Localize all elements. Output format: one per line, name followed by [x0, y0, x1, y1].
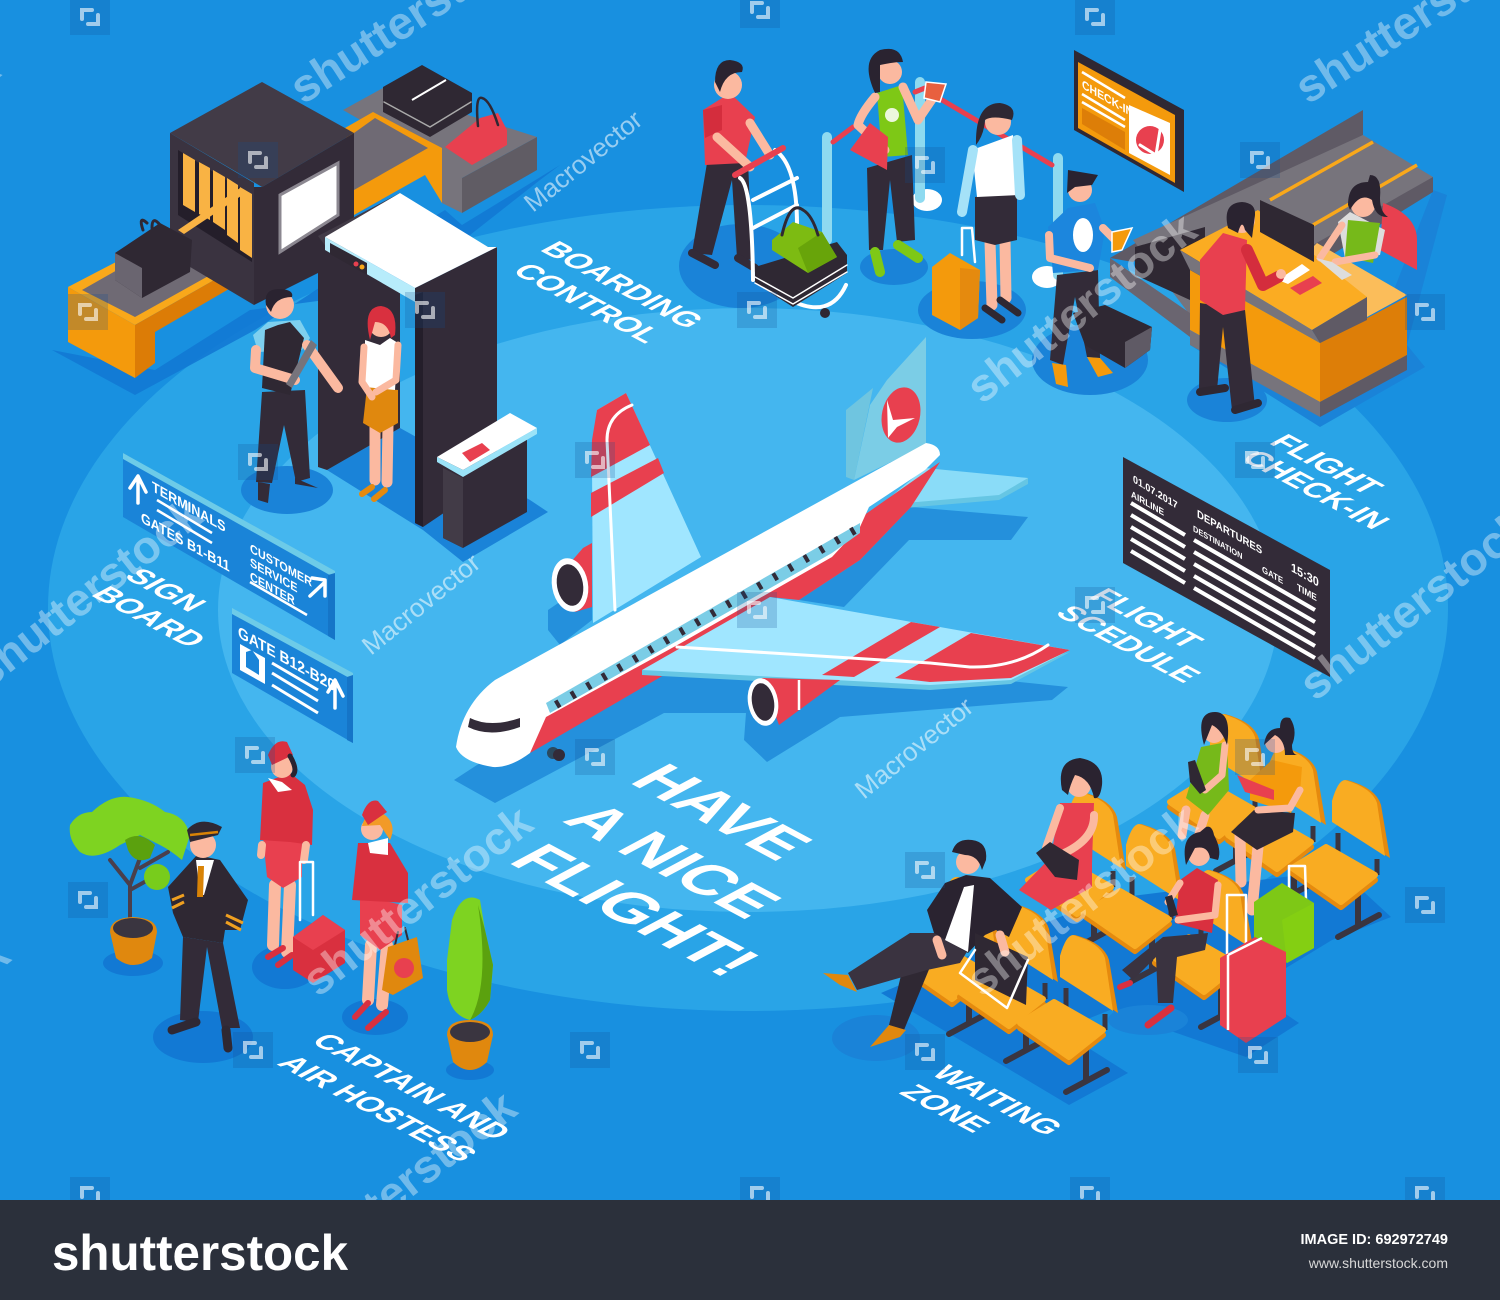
green suitcase	[1254, 866, 1314, 963]
panel: flight schedule board: 15:30	[1291, 560, 1319, 590]
label: flight scedule: SCEDULE	[1048, 601, 1209, 687]
watermarks: shutterstock	[956, 202, 1206, 413]
airplane	[454, 337, 1070, 803]
watermarks: shutterstock	[276, 1080, 526, 1291]
outer floor ellipse	[48, 205, 1448, 1011]
rope barriers	[827, 82, 1062, 288]
check-in clerk	[1316, 175, 1417, 280]
far engine	[548, 543, 592, 615]
green bag on trolley	[772, 208, 837, 273]
panel: flight schedule board: DESTINATION	[1193, 523, 1242, 561]
check-in conveyor	[1110, 110, 1433, 337]
captain	[168, 822, 248, 1048]
heading: have a nice flight: FLIGHT!	[495, 836, 775, 985]
woman with phone	[1120, 827, 1219, 1025]
far wing	[591, 393, 701, 623]
terminals sign: TERMINALS	[152, 479, 226, 537]
conveyor bench	[68, 222, 253, 378]
heading: have a nice flight: A NICE	[549, 795, 796, 927]
label: sign board: SIGN	[117, 564, 214, 616]
heading: have a nice flight	[495, 756, 827, 985]
terminals sign: CENTER	[250, 569, 295, 608]
panel: flight schedule board: GATE	[1262, 564, 1283, 586]
panel: flight schedule board	[1123, 457, 1330, 677]
red suitcase	[1220, 895, 1286, 1043]
inner floor ellipse	[218, 308, 1278, 912]
terminals sign: CUSTOMER	[250, 541, 312, 590]
panel: boarding control	[52, 65, 560, 562]
footer bar	[0, 1200, 1500, 1300]
black bag on floor	[1073, 305, 1152, 368]
ticket stand	[437, 413, 537, 548]
metal detector gate	[318, 193, 497, 527]
front row chairs	[903, 877, 1118, 1092]
floor shadow	[832, 870, 1391, 1105]
floor shadows	[679, 190, 1447, 427]
x-ray scanner	[170, 82, 354, 305]
label: boarding control: CONTROL	[505, 259, 670, 347]
gate sign	[232, 608, 353, 743]
watermarks: Macrovector	[849, 691, 979, 805]
label: sign board: BOARD	[84, 582, 215, 652]
website: www.shutterstock.com	[1308, 1255, 1448, 1271]
floor shadows	[103, 945, 494, 1080]
label: captain and air hostess: CAPTAIN AND	[304, 1029, 519, 1144]
panel: flight schedule board: AIRLINE	[1131, 489, 1164, 519]
passenger with trolley	[692, 60, 770, 268]
label: flight check-in: FLIGHT	[1262, 430, 1391, 499]
floor shadows	[52, 165, 560, 562]
terminals sign: SERVICE	[250, 555, 298, 596]
woman in white blouse with suitcase	[932, 103, 1020, 330]
man at desk in red	[1187, 202, 1286, 422]
label: waiting zone: WAITING	[924, 1061, 1071, 1140]
footer logo: shutterstock	[52, 1225, 348, 1281]
seated man in black	[823, 840, 1028, 1047]
label: boarding control: BOARDING	[533, 237, 712, 333]
gate sign: GATE B12-B20	[238, 624, 335, 696]
check-in desk	[1180, 210, 1407, 417]
fuselage	[456, 443, 940, 767]
duffel bag on belt	[115, 220, 192, 298]
right potted plant	[447, 898, 493, 1070]
middle row chairs	[1028, 792, 1253, 1027]
tail fin	[854, 337, 926, 480]
image id: IMAGE ID: 692972749	[1300, 1232, 1448, 1248]
check-in TV sign	[1074, 50, 1184, 192]
orange suitcase	[962, 228, 975, 262]
stabilizer	[881, 468, 1028, 510]
black suitcase	[383, 65, 472, 137]
computer monitor	[1260, 200, 1314, 262]
left potted tree	[70, 797, 190, 965]
watermarks: shutterstock	[292, 795, 542, 1006]
terminals sign: GATES B1-B11	[141, 510, 230, 576]
woman in red dress	[1019, 758, 1102, 910]
terminals sign	[123, 453, 335, 640]
label: flight scedule: FLIGHT	[1082, 584, 1211, 653]
laptop bag	[975, 933, 1028, 1005]
hostess two	[352, 801, 423, 1028]
woman in detector	[362, 306, 398, 499]
watermarks: Macrovector	[518, 104, 648, 218]
back baggage table	[343, 65, 537, 215]
watermarks: Macrovector	[356, 547, 486, 661]
luggage trolley	[735, 148, 846, 318]
watermarks: shutterstock	[956, 795, 1206, 1006]
panel: flight schedule board: TIME	[1297, 582, 1317, 604]
woman with red book	[1231, 717, 1302, 910]
label: flight check-in: CHECK-IN	[1234, 446, 1398, 533]
security officer	[241, 289, 338, 514]
near wing	[642, 597, 1070, 690]
back row chairs	[1170, 714, 1390, 937]
woman with tablet	[1182, 712, 1229, 840]
plane shadow	[454, 507, 1068, 803]
panel: sign boards	[123, 453, 353, 743]
woman with green top	[850, 49, 946, 272]
panel: flight schedule board: DEPARTURES	[1197, 508, 1262, 557]
hostess one	[260, 741, 345, 983]
near engine	[744, 676, 840, 728]
back tail fin	[846, 388, 873, 480]
man in blue t-shirt	[1048, 170, 1152, 387]
panel: waiting zone	[823, 712, 1391, 1105]
panel: flight schedule board: 01.07.2017	[1133, 474, 1178, 512]
panel: captain and air hostess	[70, 741, 494, 1080]
heading: have a nice flight: HAVE	[616, 756, 827, 869]
check-in TV sign: CHECK-IN	[1082, 77, 1133, 120]
red handbag	[445, 113, 507, 165]
label: captain and air hostess: AIR HOSTESS	[270, 1051, 486, 1166]
panel: flight check-in	[679, 49, 1447, 427]
label: waiting zone: ZONE	[892, 1080, 998, 1137]
black suitcase on trolley	[755, 242, 847, 307]
